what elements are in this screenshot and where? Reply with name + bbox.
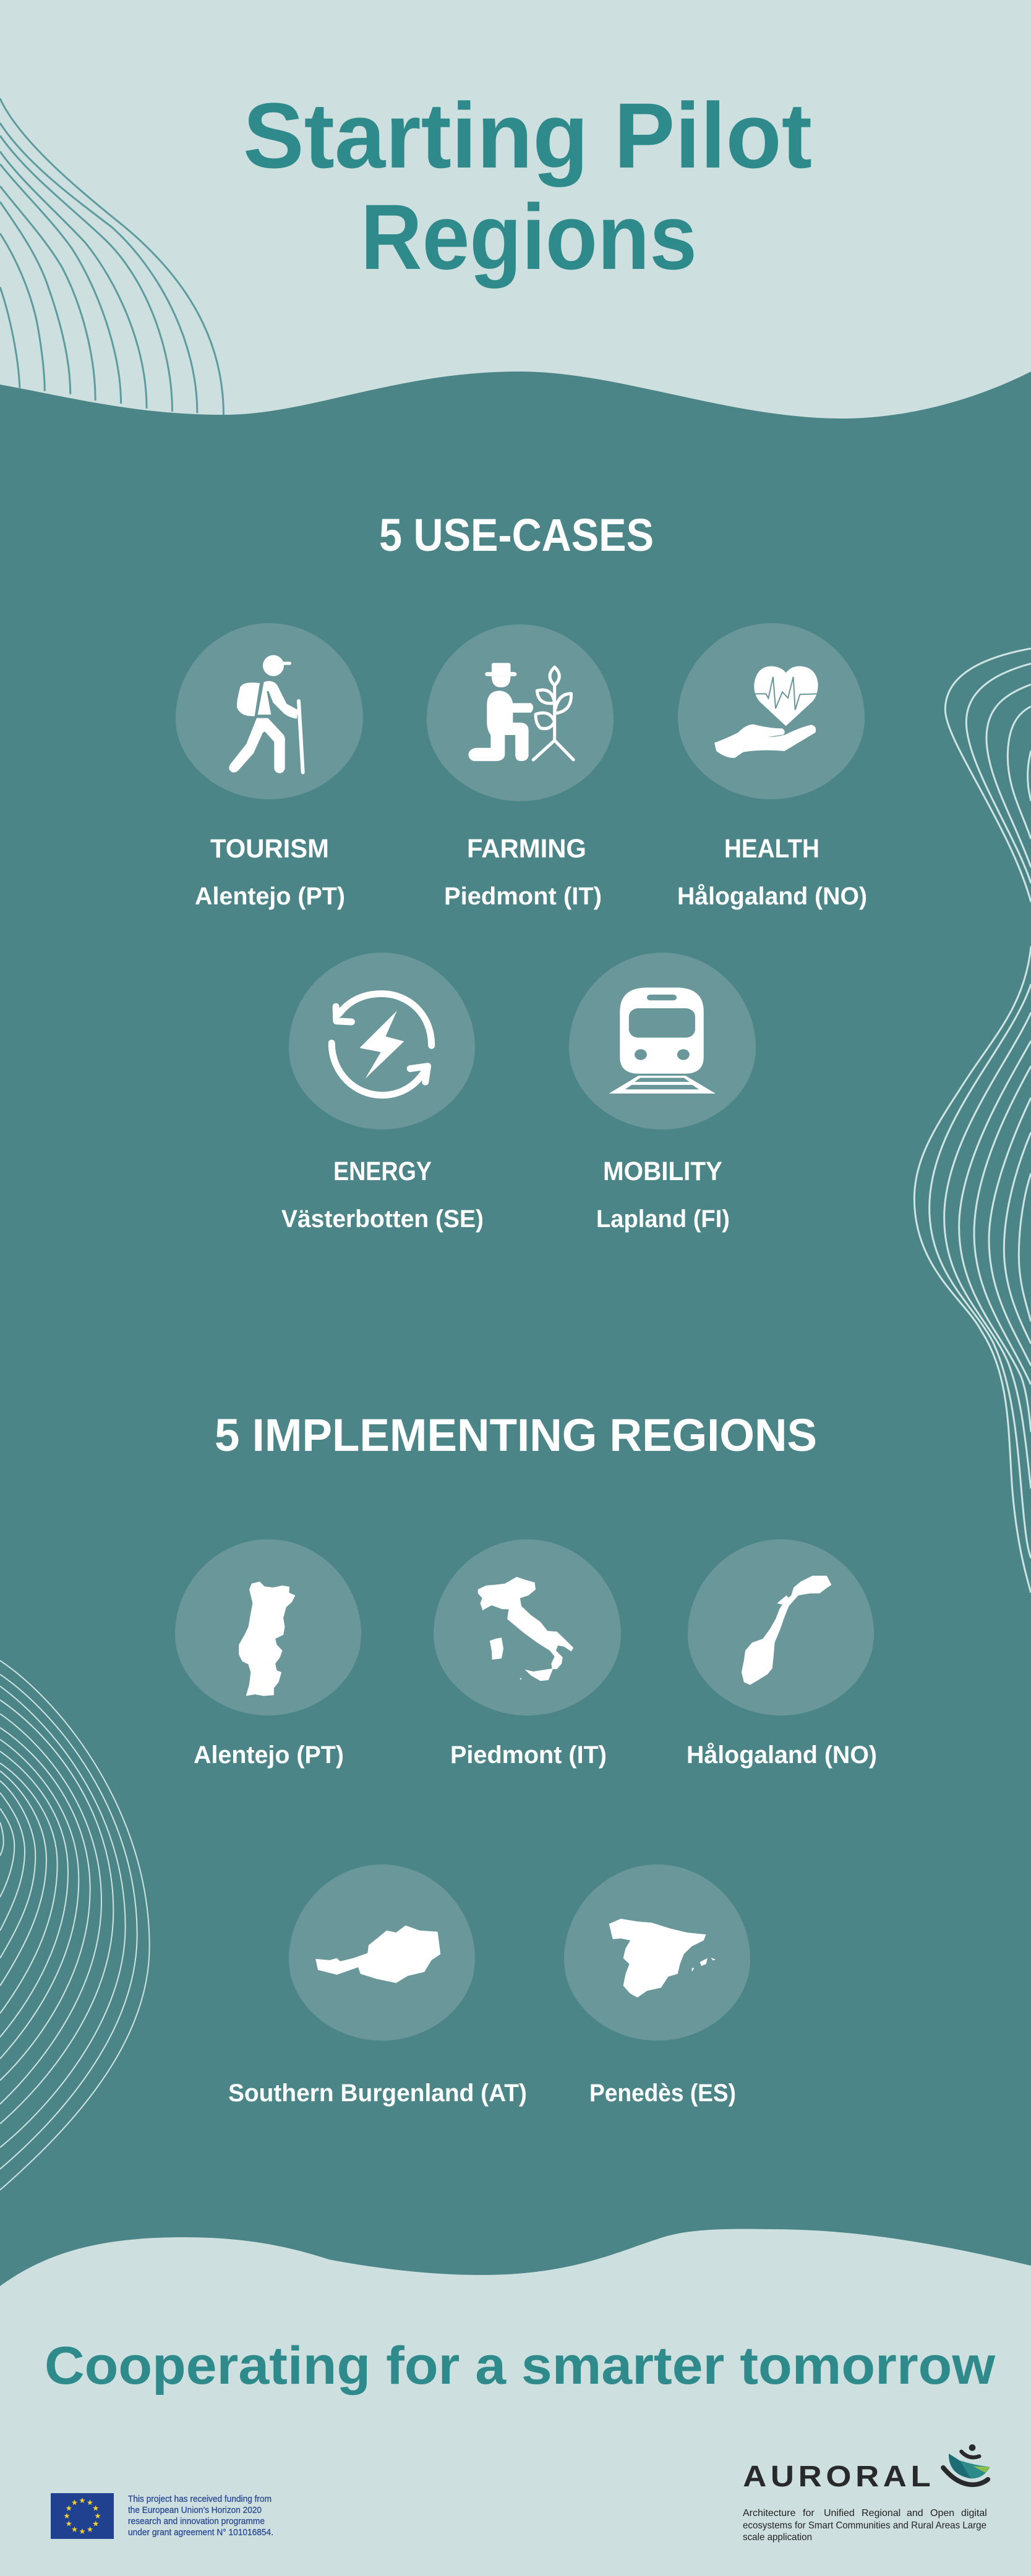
blob: Norway: [688, 1539, 874, 1715]
blob: Italy: [434, 1539, 621, 1715]
label: Piedmont: Piedmont (IT): [444, 883, 602, 910]
EU funding notice: [51, 2493, 273, 2539]
region: Norway: [687, 1539, 877, 1769]
panel: use-cases: [176, 509, 867, 1233]
logo wordmark: AURORAL: [743, 2459, 931, 2493]
blob: tourism: [176, 623, 363, 799]
blob: farming: [427, 624, 614, 801]
label: Alentejo: Alentejo (PT): [194, 1741, 344, 1769]
label: Alentejo: Alentejo (PT): [195, 883, 345, 910]
region: Spain: [564, 1864, 750, 2107]
region: Portugal: [175, 1539, 361, 1769]
use case: farming: [427, 624, 614, 910]
map: Italy: [478, 1577, 573, 1681]
funding text: [128, 2494, 273, 2538]
logo caption: Architecture: [743, 2508, 795, 2519]
blob: Portugal: [175, 1539, 361, 1715]
use case: health: [677, 623, 867, 910]
logo caption: digital: [961, 2508, 987, 2519]
region: Austria: [228, 1864, 527, 2107]
top-left wave lines: [0, 98, 223, 415]
label: tourism: TOURISM: [210, 834, 329, 864]
map: Austria: [315, 1926, 440, 1983]
logo caption: and: [907, 2508, 923, 2519]
funding text: research and innovation programme: [128, 2516, 265, 2527]
logo caption: for: [803, 2508, 815, 2519]
logo caption: Open: [930, 2508, 954, 2519]
label: Halogaland: Hålogaland (NO): [687, 1741, 877, 1769]
label: Vasterbotten: Västerbotten (SE): [281, 1205, 484, 1233]
right wave lines: [914, 648, 1031, 1593]
blob: energy: [289, 953, 475, 1129]
label: Halogaland: Hålogaland (NO): [677, 883, 867, 910]
title: [243, 83, 812, 289]
region: Italy: [434, 1539, 621, 1769]
panel: implementing regions: [175, 1409, 877, 2107]
blob: health: [678, 623, 865, 799]
icon: energy cycle: [332, 994, 432, 1095]
icon: train: [609, 987, 716, 1094]
icon: farmer and plant: [468, 663, 573, 761]
tagline: Cooperating for a smarter tomorrow: [45, 2336, 996, 2395]
use case: tourism: [176, 623, 363, 910]
label: mobility: MOBILITY: [603, 1157, 722, 1186]
label: Lapland: Lapland (FI): [596, 1205, 730, 1233]
logo caption: ecosystems for Smart Communities and Rural Areas Large: [743, 2520, 986, 2531]
use case: energy: [281, 953, 484, 1233]
title: Starting Pilot: [243, 83, 812, 187]
label: farming: FARMING: [467, 834, 586, 864]
heading: 5 use-cases: 5 USE-CASES: [379, 509, 654, 561]
title: Regions: [361, 185, 697, 289]
logo mark: [943, 2444, 990, 2485]
map: Norway: [742, 1576, 831, 1685]
blob: Austria: [289, 1864, 475, 2041]
funding text: This project has received funding from: [128, 2494, 272, 2504]
icon: hiker: [229, 655, 303, 773]
blob: Spain: [564, 1864, 750, 2041]
label: health: HEALTH: [724, 834, 819, 864]
logo caption: Unified: [824, 2508, 855, 2519]
funding text: under grant agreement N° 101016854.: [128, 2527, 273, 2538]
label: energy: ENERGY: [333, 1157, 432, 1186]
logo caption: Regional: [862, 2508, 901, 2519]
label: Penedes: Penedès (ES): [589, 2080, 736, 2107]
blob: mobility: [569, 953, 756, 1129]
label: Southern Burgenland: Southern Burgenland (AT): [228, 2080, 527, 2107]
left wave lines: [0, 1660, 150, 2190]
AURORAL logo: [743, 2444, 990, 2543]
map: Spain: [609, 1919, 716, 1997]
heading: 5 implementing regions: 5 IMPLEMENTING REGIONS: [215, 1409, 817, 1461]
use case: mobility: [569, 953, 756, 1233]
map: Portugal: [239, 1581, 295, 1696]
label: Piedmont: Piedmont (IT): [450, 1741, 607, 1769]
logo caption: scale application: [743, 2532, 812, 2543]
logo caption: [743, 2508, 987, 2543]
teal central band: [0, 372, 1031, 2286]
icon: EU flag: [51, 2493, 114, 2539]
icon: heart in hand: [714, 666, 818, 758]
funding text: the European Union’s Horizon 2020: [128, 2505, 262, 2515]
